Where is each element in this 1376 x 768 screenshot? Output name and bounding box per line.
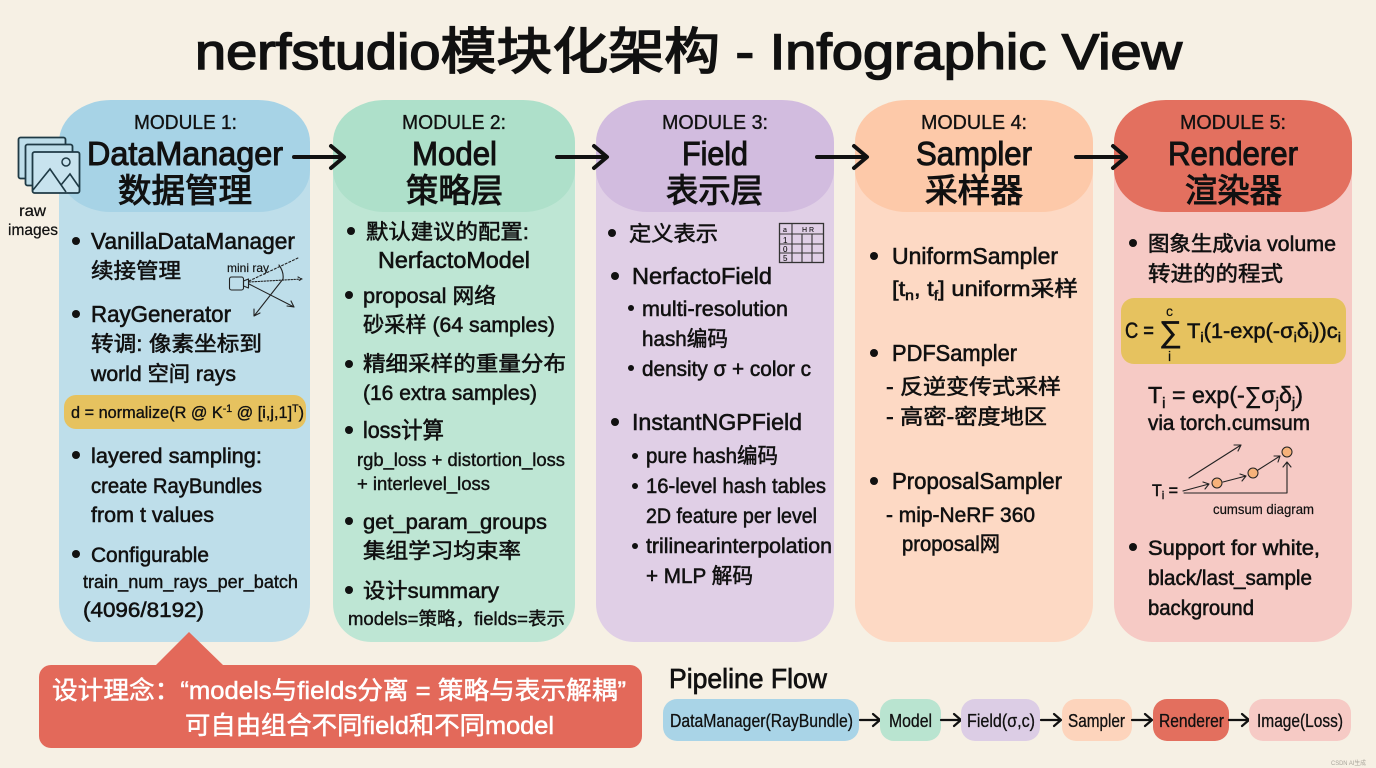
formula: volume rendering: i <box>1168 348 1171 364</box>
panel header: 表示层 <box>666 172 763 209</box>
arrow: DataManager to Model <box>294 146 344 168</box>
formula: volume rendering: C = <box>1125 318 1154 343</box>
panel header <box>855 100 1093 212</box>
step: Sampler <box>1062 699 1132 741</box>
formula: ray direction: @ [i,j,1] <box>232 403 292 422</box>
list item: PDFSampler: - 反逆变传式采样 <box>886 376 1061 399</box>
step: DataManager(RayBundle): DataManager(RayBundle) <box>670 711 853 731</box>
list item: VanillaDataManager: VanillaDataManager <box>91 228 295 254</box>
list item: RayGenerator: world 空间 rays <box>90 363 236 386</box>
list item: PDFSampler <box>870 340 1061 429</box>
panel header: DataManager <box>87 135 283 172</box>
arrow: Model to Field <box>557 146 607 168</box>
panel header: 策略层 <box>406 172 503 209</box>
list item: fine sampling: 精细采样的重量分布 <box>363 353 566 376</box>
list item: PDFSampler: PDFSampler <box>892 340 1017 366</box>
panel header: Renderer <box>1168 135 1298 172</box>
panel header <box>59 100 310 212</box>
formula: transmittance: ) <box>1295 382 1303 408</box>
list item: loss: loss计算 <box>363 417 444 443</box>
list item: VanillaDataManager: 续接管理 <box>91 260 181 283</box>
formula: ray direction: ) <box>299 403 304 422</box>
step: Model: Model <box>889 711 932 731</box>
step: Field <box>961 699 1040 741</box>
formula: volume rendering: δ <box>1297 320 1309 343</box>
arrow: Sampler to Renderer <box>1076 146 1126 168</box>
list item: get_param_groups: get_param_groups <box>363 511 547 534</box>
diagram: pipeline flow <box>663 699 1351 741</box>
formula: transmittance: = exp(-∑σ <box>1166 382 1276 408</box>
arrow: flow 1 <box>860 714 880 726</box>
step: Image(Loss): Image(Loss) <box>1257 711 1343 731</box>
list item: loss: + interlevel_loss <box>357 474 490 495</box>
formula: ray direction: d = normalize(R @ K <box>71 403 230 422</box>
panel: module 4 Sampler <box>855 100 1093 642</box>
panel: module 3 Field <box>596 100 834 642</box>
list item: background support: Support for white, <box>1148 537 1320 560</box>
list item: layered sampling: from t values <box>91 504 214 527</box>
chart: cumsum diagram: cumsum diagram <box>1213 501 1314 517</box>
formula: transmittance: via torch.cumsum <box>1148 412 1310 435</box>
callout: design philosophy <box>39 632 642 748</box>
list item: PDFSampler: - 高密-密度地区 <box>886 406 1047 429</box>
list item: ProposalSampler: - mip-NeRF 360 <box>886 504 1035 527</box>
panel header: Field <box>682 135 748 172</box>
formula: volume rendering: ))c <box>1312 320 1338 343</box>
formula: volume rendering: T <box>1187 320 1200 343</box>
formula: transmittance: j <box>1291 395 1295 412</box>
list item: layered sampling <box>72 445 262 527</box>
formula: transmittance: i <box>1162 395 1166 412</box>
list item: design summary <box>345 580 565 629</box>
list item: design summary: models=策略，fields=表示 <box>348 609 565 629</box>
arrow: flow 4 <box>1132 714 1152 726</box>
formula: transmittance: δ <box>1279 382 1292 408</box>
list item: layered sampling: create RayBundles <box>91 475 262 498</box>
list item: background support: black/last_sample <box>1148 567 1312 590</box>
list item: NerfactoField: hash编码 <box>642 328 728 351</box>
list item: InstantNGPField: 16-level hash tables <box>646 475 826 498</box>
panel body <box>596 150 834 642</box>
panel header: MODULE 3: <box>662 112 768 134</box>
list item: background support <box>1129 537 1320 620</box>
panel: module 5 Renderer <box>1114 100 1352 642</box>
formula: transmittance: T <box>1148 382 1162 408</box>
list item: Configurable: (4096/8192) <box>83 599 204 622</box>
panel header: MODULE 1: <box>134 112 237 134</box>
list item: image generation: 图象生成via volume <box>1148 233 1336 256</box>
panel body <box>59 150 310 642</box>
callout: design philosophy: 可自由组合不同field和不同model <box>185 712 554 740</box>
formula: volume rendering: i <box>1200 329 1204 345</box>
step: Field: Field(σ,c) <box>967 711 1035 731</box>
list item: NerfactoField: multi-resolution <box>642 298 788 321</box>
list item: InstantNGPField: pure hash编码 <box>646 445 778 468</box>
heading: Pipeline Flow: Pipeline Flow <box>669 663 828 694</box>
arrow: Field to Sampler <box>817 146 867 168</box>
panel: module 1 DataManager <box>59 100 310 642</box>
list item: Configurable <box>72 544 298 622</box>
label: raw images: images <box>8 222 58 239</box>
panel header: MODULE 5: <box>1180 112 1286 134</box>
panel body <box>855 150 1093 642</box>
list item: default config: NerfactoModel <box>378 247 530 273</box>
list item: UniformSampler: [t <box>892 278 904 301</box>
step: Image(Loss) <box>1249 699 1351 741</box>
list item: UniformSampler: UniformSampler <box>892 243 1058 269</box>
icon: hash table <box>780 224 824 263</box>
formula: ray direction: T <box>292 403 299 415</box>
list item: background support: background <box>1148 597 1254 620</box>
panel body <box>1114 150 1352 642</box>
list item: RayGenerator: RayGenerator <box>91 301 231 327</box>
list item: Configurable: Configurable <box>91 544 209 567</box>
label: raw images <box>8 203 58 239</box>
title: nerfstudio模块化架构 - Infographic View <box>195 24 1183 80</box>
arrow: flow 2 <box>941 714 961 726</box>
list item: get_param_groups <box>345 511 547 563</box>
list item: ProposalSampler: proposal网 <box>902 533 1000 556</box>
list item: ProposalSampler: ProposalSampler <box>892 468 1062 494</box>
list item: proposal network <box>345 285 555 337</box>
list item: proposal network: 砂采样 (64 samples) <box>363 314 555 337</box>
chart: cumsum diagram: T <box>1152 481 1162 500</box>
panel header: Sampler <box>916 135 1032 172</box>
formula: volume rendering: c <box>1166 303 1173 319</box>
step: Sampler: Sampler <box>1068 711 1125 731</box>
list item: default config <box>347 221 530 273</box>
list item: image generation <box>1129 233 1336 286</box>
step: Model <box>880 699 941 741</box>
formula: volume rendering: i <box>1309 329 1312 345</box>
formula: transmittance <box>1148 382 1310 435</box>
formula: transmittance: j <box>1275 395 1279 412</box>
panel header: 渲染器 <box>1185 172 1282 209</box>
list item: VanillaDataManager <box>72 228 295 283</box>
list item: fine sampling: (16 extra samples) <box>363 382 537 405</box>
list item: NerfactoField: density σ + color c <box>642 358 811 381</box>
list item: image generation: 转进的的程式 <box>1148 263 1283 286</box>
arrow: flow 3 <box>1041 714 1061 726</box>
icon: hash table: 0 <box>783 245 788 254</box>
list item: default config: 默认建议的配置: <box>366 221 529 244</box>
list item: proposal network: proposal 网络 <box>363 285 496 308</box>
chart: cumsum diagram: = <box>1164 481 1178 500</box>
panel header <box>596 100 834 212</box>
list item: UniformSampler: f <box>934 287 938 303</box>
chart: cumsum diagram: i <box>1162 490 1164 502</box>
panel header: Model <box>412 135 497 172</box>
list item: UniformSampler: n <box>905 287 914 303</box>
formula: ray direction: -1 <box>223 403 232 415</box>
formula: volume rendering: (1-exp(-σ <box>1204 320 1294 343</box>
panel header: 采样器 <box>925 172 1023 209</box>
list item: define representation: 定义表示 <box>629 223 718 246</box>
list item: InstantNGPField: trilinearinterpolation <box>646 535 832 558</box>
list item: InstantNGPField <box>611 409 832 588</box>
list item: UniformSampler: , t <box>914 278 934 301</box>
list item: loss <box>345 417 565 495</box>
icon: hash table: a <box>783 227 787 234</box>
panel: module 2 Model <box>333 100 575 642</box>
panel header <box>1114 100 1352 212</box>
list item: loss: rgb_loss + distortion_loss <box>357 450 565 471</box>
watermark: CSDN AI生成 <box>1331 759 1366 767</box>
list item: InstantNGPField: + MLP 解码 <box>646 565 753 588</box>
panel header <box>333 100 575 212</box>
list item: RayGenerator: 转调: 像素坐标到 <box>91 333 262 356</box>
list item: InstantNGPField: 2D feature per level <box>646 505 817 528</box>
list item: design summary: 设计summary <box>363 580 500 603</box>
icon: hash table: H R <box>802 227 814 234</box>
list item: NerfactoField: NerfactoField <box>632 263 772 289</box>
panel header: MODULE 4: <box>921 112 1027 134</box>
icon: mini ray camera diagram <box>227 258 302 316</box>
arrow: flow 5 <box>1229 714 1249 726</box>
panel header: 数据管理 <box>118 172 252 209</box>
label: raw images: raw <box>19 203 46 220</box>
icon: hash table: 5 <box>783 254 788 263</box>
formula: ray direction <box>64 395 306 429</box>
icon: hash table: 1 <box>783 236 788 245</box>
step: Renderer <box>1153 699 1229 741</box>
step: DataManager(RayBundle) <box>663 699 859 741</box>
callout: design philosophy: 设计理念：“models与fields分离 = 策略与表示解耦” <box>52 677 626 705</box>
list item: layered sampling: layered sampling: <box>91 445 262 468</box>
list item: InstantNGPField: InstantNGPField <box>632 409 802 435</box>
list item: ProposalSampler <box>870 468 1062 556</box>
formula: volume rendering: i <box>1294 329 1297 345</box>
icon: raw images stack <box>18 138 80 193</box>
list item: RayGenerator <box>72 301 262 386</box>
list item: get_param_groups: 集组学习均束率 <box>363 540 521 563</box>
panel body <box>333 150 575 642</box>
panel header: MODULE 2: <box>402 112 506 134</box>
step: Renderer: Renderer <box>1159 711 1224 731</box>
list item: NerfactoField <box>611 263 811 381</box>
icon: mini ray camera diagram: mini ray <box>227 261 269 275</box>
formula: volume rendering: i <box>1338 329 1341 345</box>
chart: cumsum diagram <box>1152 445 1314 517</box>
list item: UniformSampler <box>870 243 1078 303</box>
list item: Configurable: train_num_rays_per_batch <box>83 572 298 593</box>
list item: UniformSampler: ] uniform采样 <box>938 278 1078 301</box>
formula: volume rendering <box>1121 298 1346 364</box>
formula: volume rendering: ∑ <box>1159 316 1182 349</box>
list item: fine sampling <box>345 353 566 405</box>
